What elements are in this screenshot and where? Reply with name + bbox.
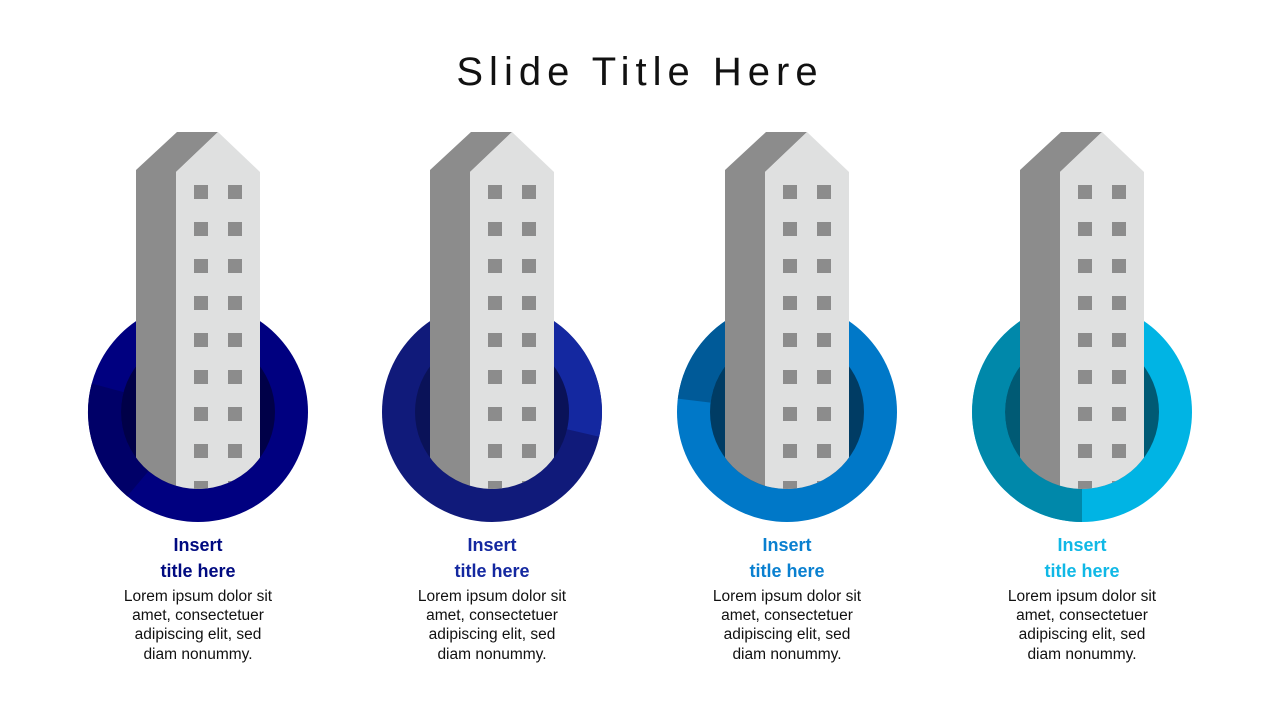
heading 3: Insert: [762, 535, 812, 555]
heading 4: title here: [1044, 561, 1120, 581]
heading 3: title here: [749, 561, 825, 581]
body 1: adipiscing elit, sed: [135, 626, 261, 643]
body 1: diam nonummy.: [143, 646, 253, 663]
heading 2: title here: [454, 561, 530, 581]
icon: building 2: [430, 132, 554, 500]
body 2: Lorem ipsum dolor sit: [418, 588, 566, 605]
body 3: Lorem ipsum dolor sit: [713, 588, 861, 605]
body 1: amet, consectetuer: [132, 607, 264, 624]
body 1: Lorem ipsum dolor sit: [124, 588, 272, 605]
body 2: amet, consectetuer: [426, 607, 558, 624]
heading 1: title here: [160, 561, 236, 581]
body 3: amet, consectetuer: [721, 607, 853, 624]
body 3: diam nonummy.: [732, 646, 842, 663]
body 2: diam nonummy.: [437, 646, 547, 663]
heading 2: Insert: [467, 535, 517, 555]
heading 4: Insert: [1057, 535, 1107, 555]
item 3: [677, 132, 897, 663]
body 4: Lorem ipsum dolor sit: [1008, 588, 1156, 605]
icon: building 4: [1020, 132, 1144, 500]
body 2: adipiscing elit, sed: [429, 626, 555, 643]
body 4: amet, consectetuer: [1016, 607, 1148, 624]
body 3: adipiscing elit, sed: [724, 626, 850, 643]
title: Slide Title Here: [456, 50, 824, 94]
item 2: [382, 132, 602, 663]
icon: building 1: [136, 132, 260, 500]
icon: building 3: [725, 132, 849, 500]
item 1: [88, 132, 308, 663]
ring 1: [88, 302, 308, 522]
ring 3: [677, 302, 897, 522]
ring 2: [382, 302, 602, 522]
ring 4: [972, 302, 1192, 522]
body 4: diam nonummy.: [1027, 646, 1137, 663]
item 4: [972, 132, 1192, 663]
body 4: adipiscing elit, sed: [1019, 626, 1145, 643]
heading 1: Insert: [173, 535, 223, 555]
